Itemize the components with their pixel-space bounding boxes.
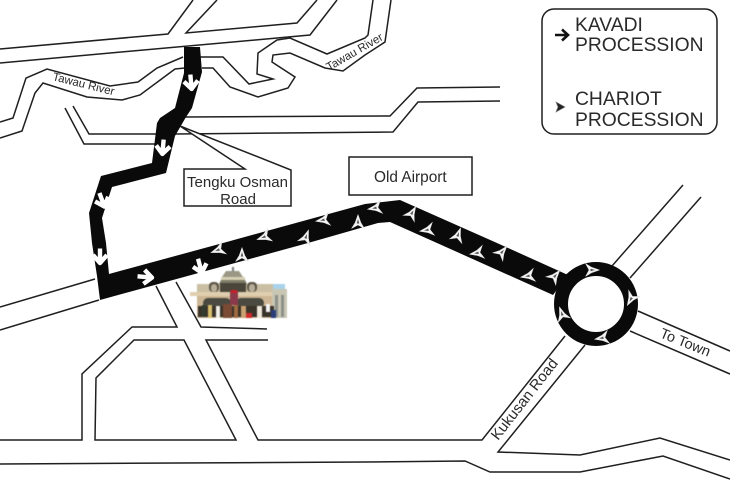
- middle road: [65, 87, 500, 144]
- river label east: Tawau River: [324, 31, 385, 74]
- kavadi legend text: [575, 15, 704, 56]
- kavadi legend text: PROCESSION: [575, 35, 704, 56]
- west road: [0, 279, 99, 330]
- river label west: Tawau River: [51, 71, 116, 98]
- Kavadi procession arrows: [93, 74, 209, 285]
- Tawau River: [0, 0, 391, 138]
- chariot legend text: PROCESSION: [575, 110, 704, 131]
- Old Airport label: [349, 157, 472, 195]
- Tengku Osman Road callout: Tengku Osman: [187, 174, 288, 191]
- Tengku Osman Road callout: [180, 126, 291, 208]
- icon: chariot arrowhead: [556, 102, 565, 112]
- roads from roundabout: [612, 185, 730, 374]
- To Town label: To Town: [658, 326, 713, 361]
- southern side roads: [0, 282, 730, 479]
- chariot legend text: CHARIOT: [575, 89, 662, 110]
- northern roads: [0, 0, 337, 63]
- Old Airport label: Old Airport: [374, 169, 447, 186]
- kavadi legend text: KAVADI: [575, 15, 643, 36]
- chariot legend text: [575, 89, 704, 131]
- Kukusan Road label: Kukusan Road: [488, 355, 562, 443]
- black procession route: [89, 47, 568, 300]
- temple photo: [190, 267, 287, 318]
- legend: [542, 9, 717, 134]
- icon: kavadi arrow: [555, 30, 568, 40]
- Tengku Osman Road callout: Road: [220, 191, 256, 208]
- roundabout: [561, 269, 631, 339]
- Chariot procession arrowheads: [209, 200, 640, 346]
